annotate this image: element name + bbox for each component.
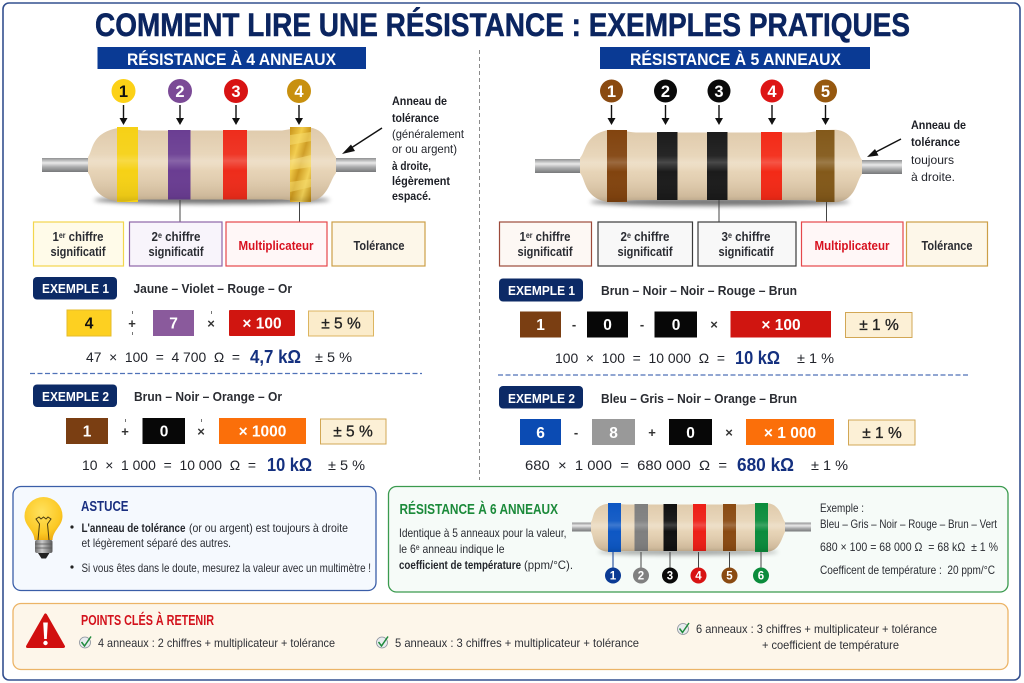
heading: 4 bands: [98, 47, 366, 69]
band number markers: 6: [758, 570, 764, 582]
band role boxes: 3: [722, 229, 729, 244]
tolerance note with arrow: [867, 118, 966, 184]
band role boxes: Tolérance: [354, 238, 404, 253]
tolerance note with arrow: (généralement: [392, 127, 465, 141]
colour list: Bleu – Gris – Noir – Orange – Brun: [601, 391, 797, 406]
band role boxes: significatif: [718, 244, 774, 259]
tip bullets: [70, 521, 371, 575]
band number markers: 4: [294, 83, 304, 101]
colour chips: -: [640, 317, 644, 332]
colour chips: × 100: [242, 316, 282, 332]
band number markers: 5: [726, 570, 733, 582]
worked example: 680 × 100 = 68 000 Ω = 68 kΩ ± 1 %: [820, 540, 998, 554]
description: e: [416, 543, 420, 552]
tolerance note with arrow: Anneau de: [392, 94, 447, 108]
band number markers: 1: [610, 570, 617, 582]
band role boxes: significatif: [618, 244, 673, 259]
band role boxes: 1: [520, 229, 527, 244]
description: Identique à 5 anneaux pour la valeur,: [399, 526, 566, 540]
badge: [499, 386, 583, 408]
colour chips: × 100: [761, 317, 801, 334]
panel: tip: [13, 486, 376, 590]
description: le 6: [399, 542, 418, 556]
heading: 5 bands: [600, 47, 870, 69]
panel: 5-band resistor: [500, 47, 988, 266]
5-band resistor drawing: [535, 130, 902, 206]
tolerance note with arrow: à droite.: [911, 170, 955, 184]
tip bullets: et légèrement séparé des autres.: [82, 536, 231, 550]
badge: EXEMPLE 2: [508, 391, 575, 406]
worked example: Coefficent de température : 20 ppm/°C: [820, 563, 995, 577]
badge: EXEMPLE 1: [42, 281, 109, 296]
icon: warning triangle: [28, 615, 64, 646]
formula: ± 5 %: [328, 457, 365, 473]
colour chips: [66, 418, 386, 444]
example 1, 5 bands: [499, 278, 912, 368]
formula: 47 × 100 = 4 700 Ω =: [86, 349, 240, 365]
formula: 10 × 1 000 = 10 000 Ω =: [82, 457, 256, 473]
colour chips: [520, 419, 915, 445]
colour list: Jaune – Violet – Rouge – Or: [134, 281, 292, 296]
colour chips: × 1 000: [764, 425, 816, 442]
band role boxes: significatif: [50, 244, 106, 259]
tolerance note with arrow: Anneau de: [911, 118, 966, 132]
formula: [82, 455, 365, 475]
band role boxes: chiffre: [65, 229, 104, 244]
colour chips: 0: [672, 317, 680, 334]
description: (ppm/°C).: [524, 558, 573, 572]
colour chips: ± 5 %: [333, 424, 373, 440]
badge: [33, 277, 117, 300]
colour chips: 4: [85, 316, 94, 332]
colour chips: 0: [603, 317, 612, 334]
formula: 10 kΩ: [267, 455, 312, 475]
band role boxes: er: [59, 231, 65, 240]
colour chips: ± 5 %: [321, 316, 361, 332]
band role boxes: significatif: [148, 244, 204, 259]
tolerance note with arrow: tolérance: [911, 135, 960, 149]
colour chips: 7: [169, 316, 178, 332]
formula: [525, 455, 848, 475]
band role boxes: 2: [152, 229, 159, 244]
badge: EXEMPLE 1: [508, 283, 575, 298]
tip bullets: (or ou argent) est toujours à droite: [189, 521, 348, 535]
band number markers: 2: [175, 83, 185, 101]
formula: 100 × 100 = 10 000 Ω =: [555, 350, 725, 366]
example 1, 4 bands: [33, 277, 374, 367]
description: anneau indique le: [420, 542, 505, 556]
colour chips: 8: [609, 425, 618, 442]
band role boxes: 1: [52, 229, 60, 244]
tolerance note with arrow: toujours: [911, 153, 954, 167]
band number markers: 3: [714, 83, 724, 101]
panel: 4-band resistor: [34, 47, 465, 266]
formula: ± 1 %: [811, 457, 848, 473]
tip bullets: L'anneau de tolérance: [82, 521, 186, 535]
worked example: Exemple :: [820, 501, 864, 515]
band number markers: 4: [695, 570, 702, 582]
panel: key points: [13, 604, 1008, 670]
colour chips: ± 1 %: [862, 425, 902, 442]
heading: 6 bands: RÉSISTANCE À 6 ANNEAUX: [400, 501, 558, 518]
colour chips: [520, 311, 912, 338]
colour chips: 6: [536, 425, 545, 442]
band number markers: [605, 552, 769, 584]
band number markers: 3: [231, 83, 241, 101]
title: COMMENT LIRE UNE RÉSISTANCE : EXEMPLES PRATIQUES: [95, 7, 910, 43]
colour list: Brun – Noir – Noir – Rouge – Brun: [601, 283, 797, 298]
key point: 6 bands: [678, 622, 937, 652]
heading: 4 bands: RÉSISTANCE À 4 ANNEAUX: [127, 50, 336, 69]
tolerance note with arrow: à droite,: [392, 159, 431, 173]
4-band resistor drawing: [42, 127, 376, 204]
tolerance note with arrow: tolérance: [392, 111, 439, 125]
band role boxes: e: [627, 231, 631, 240]
colour chips: ×: [207, 316, 215, 331]
description: coefficient de température: [399, 558, 521, 572]
band number markers: 1: [607, 83, 616, 101]
key point: 5 bands: 5 anneaux : 3 chiffres + multiplicateur + tolérance: [395, 636, 639, 650]
band number markers: [112, 79, 311, 125]
band number markers: 2: [661, 83, 670, 101]
formula: [555, 348, 834, 368]
colour list: Brun – Noir – Orange – Or: [134, 389, 282, 404]
band role boxes: [500, 222, 988, 266]
colour chips: +: [128, 316, 136, 331]
formula: [86, 347, 352, 367]
band number markers: 4: [767, 83, 777, 101]
formula: ± 5 %: [315, 349, 352, 365]
band role boxes: Tolérance: [922, 238, 972, 253]
colour chips: -: [574, 425, 578, 440]
band number markers: 5: [821, 83, 830, 101]
band role boxes: chiffre: [532, 229, 570, 244]
heading: tip: ASTUCE: [81, 499, 129, 515]
band role boxes: Multiplicateur: [238, 238, 314, 253]
band number markers: [600, 80, 837, 125]
band role boxes: 2: [620, 229, 628, 244]
band role boxes: Multiplicateur: [814, 238, 890, 253]
band role boxes: [34, 222, 425, 266]
band number markers: 2: [638, 570, 644, 582]
example 2, 5 bands: [499, 386, 915, 475]
panel: 6-band resistor: [388, 486, 1008, 592]
6-band resistor drawing: [572, 503, 811, 555]
band number markers: 3: [667, 570, 673, 582]
colour chips: -: [572, 317, 576, 332]
band role boxes: chiffre: [732, 229, 770, 244]
tip bullets: Si vous êtes dans le doute, mesurez la valeur avec un multimètre !: [82, 561, 371, 575]
colour chips: +: [648, 425, 656, 440]
heading: 5 bands: RÉSISTANCE À 5 ANNEAUX: [630, 50, 841, 69]
band role boxes: e: [158, 231, 162, 240]
tolerance note with arrow: espacé.: [392, 189, 431, 203]
colour chips: 0: [686, 425, 695, 442]
band role boxes: chiffre: [162, 229, 200, 244]
colour chips: 0: [160, 424, 168, 440]
heading: key points: POINTS CLÉS À RETENIR: [81, 612, 214, 629]
colour chips: × 1000: [239, 424, 286, 440]
tolerance note with arrow: [342, 94, 465, 203]
band role boxes: er: [526, 231, 532, 240]
example 2, 4 bands: [33, 384, 386, 475]
band role boxes: significatif: [518, 244, 573, 259]
formula: 680 kΩ: [737, 455, 794, 475]
key point: 6 bands: 6 anneaux : 3 chiffres + multiplicateur + tolérance: [696, 622, 937, 636]
badge: [499, 278, 583, 302]
formula: 10 kΩ: [735, 348, 780, 368]
badge: EXEMPLE 2: [42, 389, 109, 404]
colour chips: ×: [197, 424, 205, 439]
formula: 4,7 kΩ: [250, 347, 301, 367]
badge: [33, 384, 117, 407]
colour chips: ± 1 %: [859, 317, 899, 334]
colour chips: ×: [725, 425, 733, 440]
band role boxes: e: [728, 231, 732, 240]
tolerance note with arrow: or ou argent): [392, 142, 457, 156]
colour chips: [67, 310, 374, 336]
formula: 680 × 1 000 = 680 000 Ω =: [525, 457, 727, 473]
colour chips: 1: [536, 317, 545, 334]
formula: ± 1 %: [797, 350, 834, 366]
colour chips: 1: [83, 424, 92, 440]
band role boxes: chiffre: [631, 229, 670, 244]
colour chips: +: [121, 424, 129, 439]
band number markers: 1: [119, 83, 128, 101]
tolerance note with arrow: légèrement: [392, 174, 450, 188]
column separator: [478, 50, 480, 480]
icon: light bulb: [24, 497, 62, 558]
colour chips: ×: [710, 317, 718, 332]
worked example: [820, 501, 998, 577]
description: [399, 526, 573, 572]
key point: 6 bands: + coefficient de température: [762, 638, 899, 652]
key point: 4 bands: 4 anneaux : 2 chiffres + multiplicateur + tolérance: [98, 636, 335, 650]
